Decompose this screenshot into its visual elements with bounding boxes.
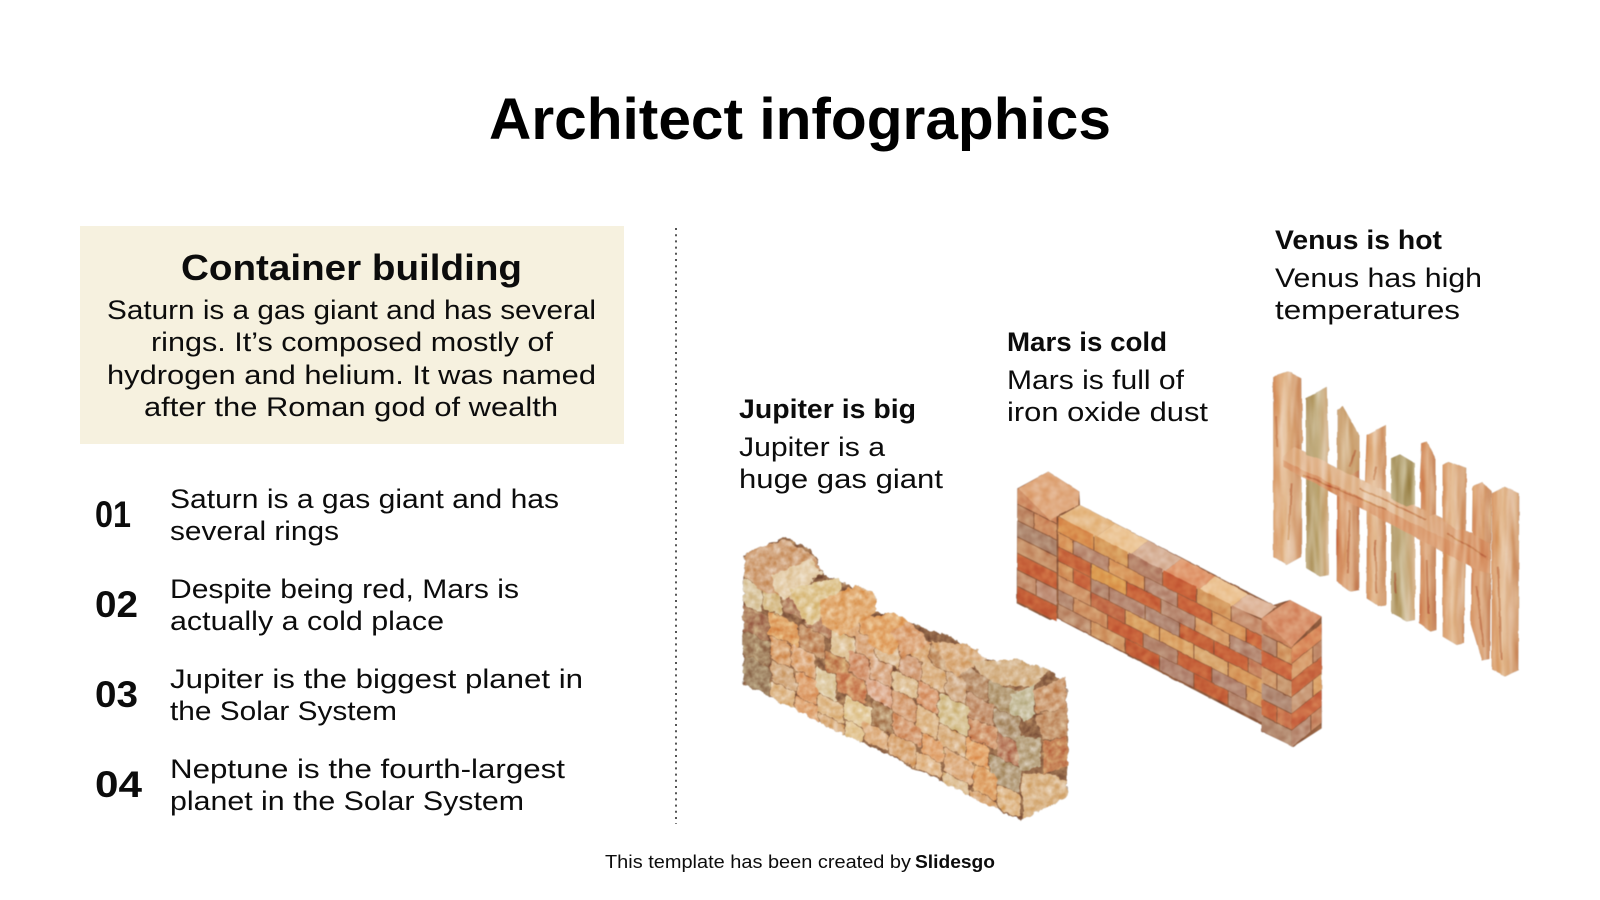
label: Venus: [1275, 225, 1482, 325]
list item 03: [95, 664, 583, 726]
pickets upper layer: [1273, 372, 1519, 677]
illustration: dry stone wall: [743, 537, 1068, 822]
footer credit: Slidesgo: [915, 852, 995, 872]
label: Venus: temperatures: [1275, 295, 1460, 325]
list item 04: [95, 754, 566, 816]
list item 01: Saturn is a gas giant and has: [170, 484, 559, 514]
list item 04: planet in the Solar System: [170, 786, 524, 816]
list item 04: Neptune is the fourth-largest: [170, 754, 566, 784]
fence rail: [1283, 447, 1490, 573]
label: Mars: Mars is cold: [1007, 327, 1167, 357]
panel description: Saturn is a gas giant and has several: [107, 295, 596, 325]
panel heading: Container building: [181, 247, 522, 288]
title: Architect infographics: [489, 87, 1111, 152]
list item 01: several rings: [170, 516, 339, 546]
list item 01: [95, 484, 559, 546]
brick wall silhouette: [1017, 472, 1322, 747]
panel description: rings. It’s composed mostly of: [151, 327, 554, 357]
footer credit: This template has been created by: [605, 852, 911, 872]
list item 02: [95, 574, 519, 636]
right pillar side bricks: [1292, 623, 1322, 747]
label: Jupiter: Jupiter is a: [739, 432, 886, 462]
panel description: hydrogen and helium. It was named: [107, 360, 596, 390]
list item 03: Jupiter is the biggest planet in: [170, 664, 583, 694]
label: Jupiter: [739, 394, 944, 494]
panel description: after the Roman god of wealth: [144, 392, 558, 422]
label: Venus: Venus is hot: [1275, 225, 1442, 255]
wall front bricks: [1058, 517, 1263, 723]
wood grain streaks: [1276, 417, 1502, 660]
right pillar front bricks: [1262, 618, 1292, 746]
pickets lower layer: [1273, 372, 1492, 660]
panel description: [107, 295, 596, 422]
list item 02: actually a cold place: [170, 606, 444, 636]
list item 02: Despite being red, Mars is: [170, 574, 519, 604]
label: Mars: Mars is full of: [1007, 365, 1185, 395]
list item 01: 01: [95, 494, 131, 535]
panel: container building: [80, 226, 624, 444]
illustration: wooden picket fence: [1273, 372, 1519, 677]
list item 04: 04: [95, 764, 142, 805]
numbered list: [95, 484, 583, 816]
illustration: brick wall: [1017, 472, 1322, 747]
label: Jupiter: Jupiter is big: [739, 394, 916, 424]
label: Mars: iron oxide dust: [1007, 397, 1209, 427]
label: Mars: [1007, 327, 1209, 427]
list item 03: 03: [95, 674, 138, 715]
list item 03: the Solar System: [170, 696, 397, 726]
label: Venus: Venus has high: [1275, 263, 1482, 293]
left pillar bricks: [1017, 488, 1057, 621]
label: Jupiter: huge gas giant: [739, 464, 944, 494]
list item 02: 02: [95, 584, 138, 625]
wall top cap blocks: [1059, 505, 1115, 537]
